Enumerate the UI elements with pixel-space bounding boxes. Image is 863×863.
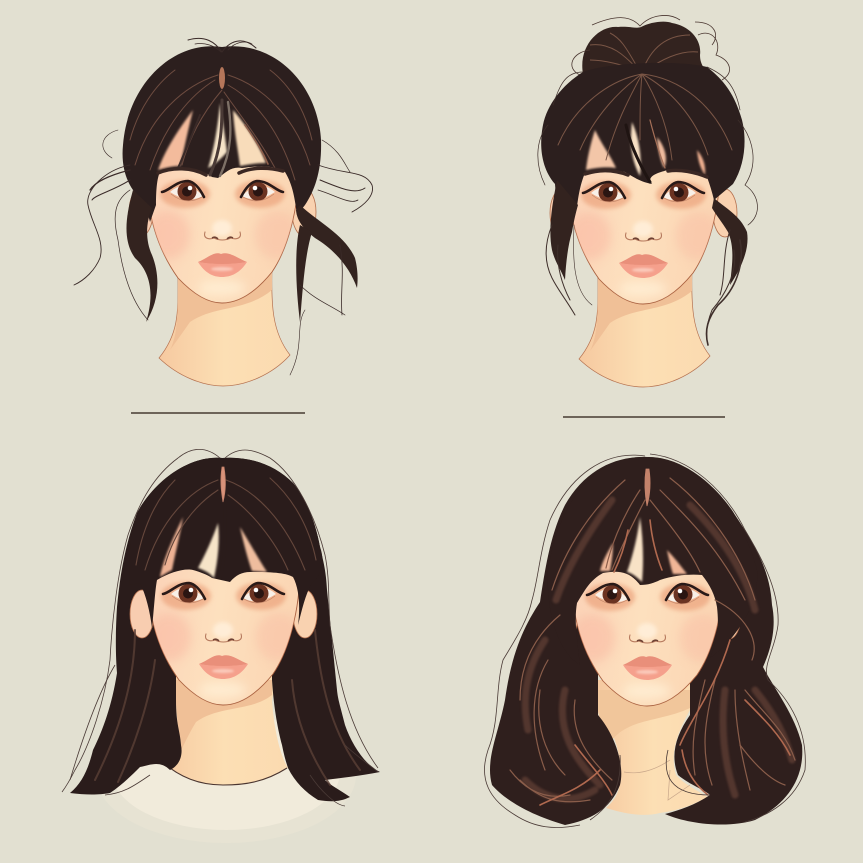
forehead gaps between bang strands bbox=[600, 517, 687, 582]
neck bbox=[579, 266, 710, 387]
hair outline strands bbox=[62, 449, 378, 806]
divider line: top-left bbox=[131, 412, 305, 414]
parting bbox=[645, 469, 650, 506]
divider line: top-right bbox=[563, 416, 725, 418]
collarbone lines bbox=[624, 760, 690, 800]
parting bbox=[221, 467, 225, 502]
face bbox=[550, 102, 737, 304]
hair strands bbox=[95, 478, 360, 785]
neck bbox=[160, 670, 288, 785]
shirt bbox=[96, 707, 356, 843]
face bbox=[554, 504, 741, 706]
hair highlights: fine strands bbox=[510, 478, 795, 805]
forehead gaps between bang strands bbox=[160, 517, 267, 578]
hair highlights: broad soft bands bbox=[525, 500, 792, 799]
flyaway strands bbox=[538, 67, 757, 345]
forehead gaps between bang strands bbox=[158, 103, 266, 170]
bang and crown strands bbox=[130, 70, 312, 180]
hair cap with bangs bbox=[123, 46, 321, 222]
parting bbox=[219, 67, 225, 89]
neck bbox=[159, 265, 290, 386]
side tendrils bbox=[550, 180, 748, 285]
loose flyaway tendrils bbox=[74, 38, 373, 375]
top bun bbox=[572, 15, 730, 80]
back hair bbox=[490, 457, 802, 825]
back hair bbox=[70, 458, 380, 801]
bangs and crown bbox=[129, 458, 322, 628]
neck shadow bbox=[176, 680, 272, 752]
portrait: top-left, loose updo with wispy bangs bbox=[74, 38, 373, 386]
hair dome with full bangs bbox=[541, 63, 745, 218]
eyebrows bbox=[158, 168, 283, 175]
collar bbox=[160, 760, 287, 785]
portrait: bottom-left, long straight hair with bangs bbox=[62, 449, 380, 843]
flyaway outline strands bbox=[484, 454, 805, 828]
neck bbox=[598, 680, 708, 815]
bang strands bbox=[558, 74, 732, 182]
neck shadow bbox=[598, 690, 690, 740]
portrait: top-right, messy bun with full bangs bbox=[538, 15, 757, 387]
bangs and crown bbox=[548, 457, 757, 665]
face bbox=[130, 503, 317, 705]
eyebrows bbox=[585, 170, 707, 177]
portrait: bottom-right, wavy shoulder-length hair with bangs bbox=[484, 454, 805, 828]
face bbox=[129, 101, 316, 303]
forehead gaps between bang strands bbox=[586, 122, 705, 176]
thick side tendrils bbox=[126, 190, 358, 322]
